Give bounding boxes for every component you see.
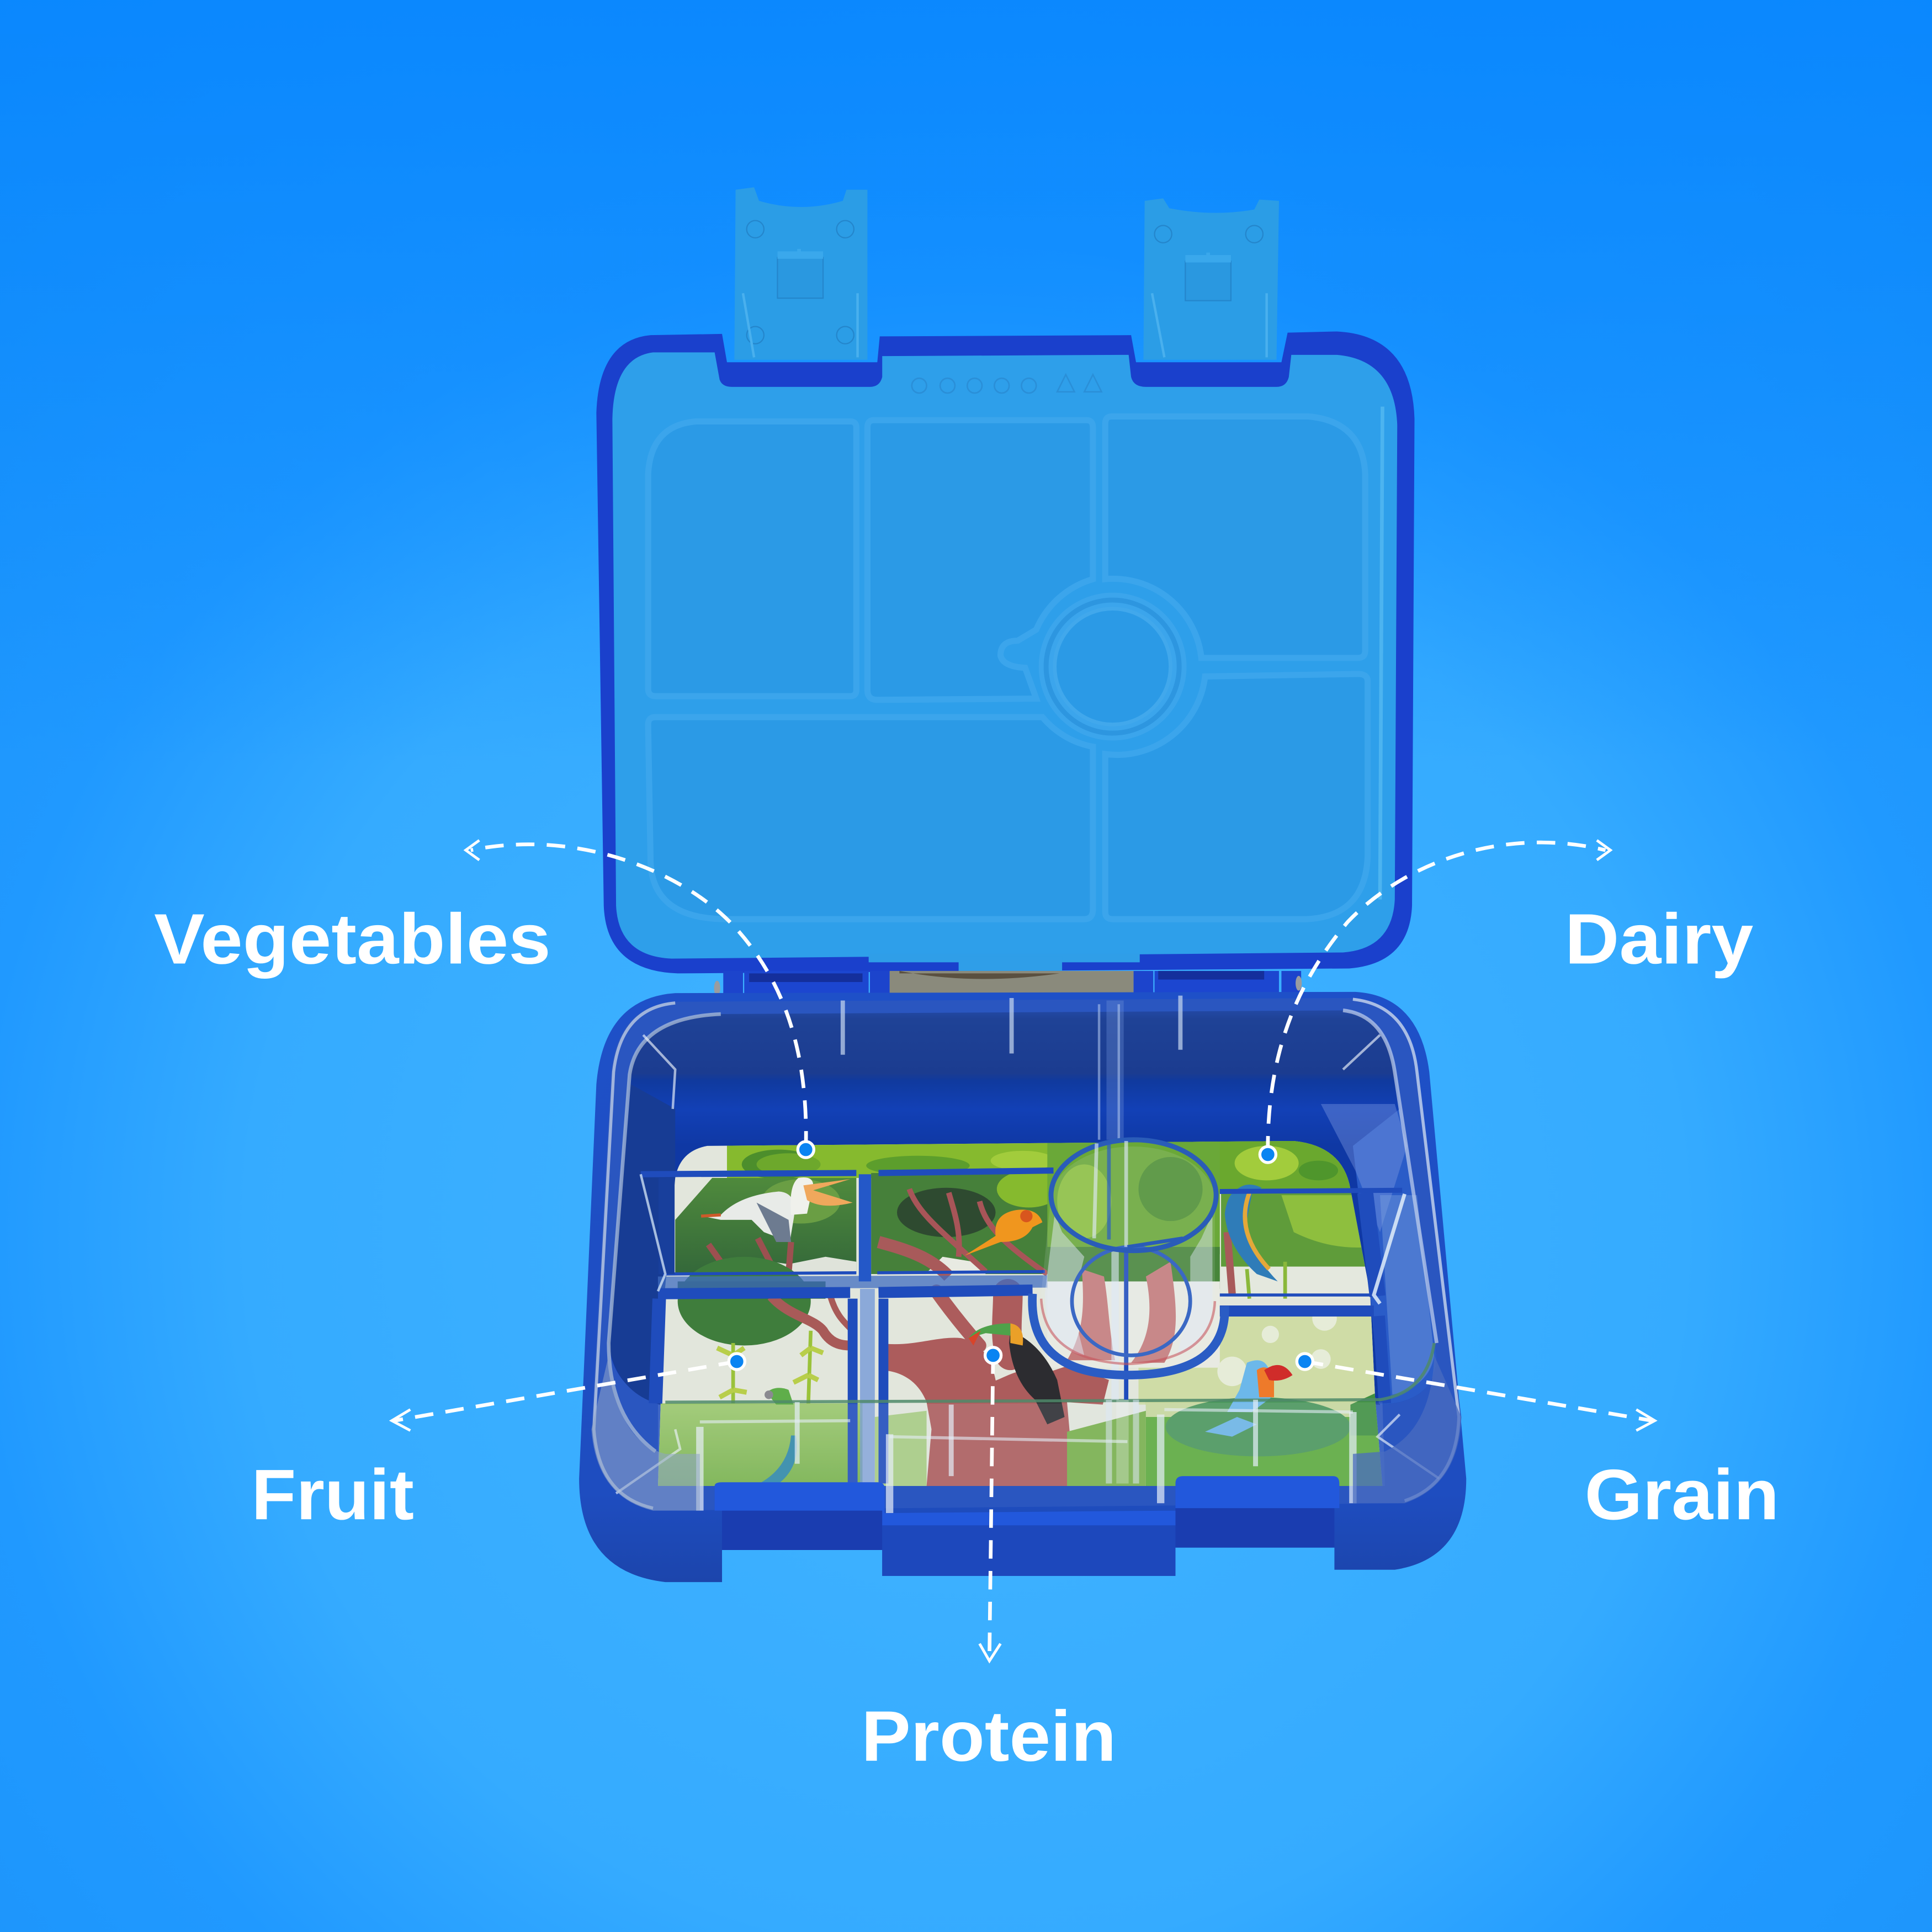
centre foliage [871, 1171, 1061, 1276]
back wall ribs [843, 996, 1180, 1055]
cup-area backdrop [1047, 1141, 1220, 1368]
callout line: fruit [392, 1362, 737, 1431]
cup walls [1045, 1214, 1084, 1355]
pelican foliage [675, 1178, 856, 1274]
front lip line [700, 1410, 1353, 1442]
front rim [665, 1343, 1434, 1402]
bird: toucan [968, 1323, 1065, 1424]
callout lines [392, 840, 1655, 1661]
back wall [609, 1010, 1437, 1405]
middle horizontal divider [663, 1272, 1045, 1274]
lower left foliage [678, 1257, 853, 1405]
label: Vegetables: Vegetables [154, 900, 551, 979]
ground [658, 1390, 1386, 1491]
hinge area [714, 971, 1302, 1000]
vertical divider back [1099, 1004, 1119, 1140]
open tab [869, 954, 1140, 976]
upper horizontal divider [641, 1171, 1053, 1174]
lunch box [579, 187, 1466, 1582]
callout dots [729, 1142, 1313, 1370]
right side wall [1353, 1109, 1437, 1405]
lid compartment: upper middle [867, 420, 1093, 700]
lid compartment: centre ring [1039, 593, 1187, 741]
label: Fruit: Fruit [251, 1455, 414, 1535]
tree trunk [879, 1338, 1109, 1486]
left compartment walls [663, 1178, 670, 1274]
tree branches [936, 1291, 1010, 1355]
diagonal glass panels [641, 1174, 665, 1291]
lower glass corners [591, 1355, 1461, 1511]
callout line: vegetables [466, 840, 806, 1150]
bird: pelican [701, 1177, 853, 1242]
bird: macaw [1225, 1185, 1278, 1281]
glass gap band [658, 1281, 1047, 1283]
lid inner tray [612, 352, 1397, 959]
open lid [596, 187, 1414, 976]
lid compartment: upper left [648, 421, 856, 696]
box base [579, 992, 1466, 1582]
clear tray dividers [594, 996, 1459, 1513]
moulded recycling marks [912, 375, 1102, 393]
clasp: right [1143, 198, 1279, 360]
outer rim [594, 1003, 675, 1508]
label: Dairy: Dairy [1565, 900, 1753, 979]
jungle picture [658, 1141, 1382, 1486]
central divider lower [1109, 1247, 1136, 1484]
label: Protein: Protein [861, 1697, 1116, 1776]
front wall ribs [797, 1400, 1256, 1476]
bird: red beak parrot [1205, 1360, 1293, 1437]
clasp: left [734, 187, 867, 360]
dip cup cylinder [1032, 1140, 1225, 1375]
corner reflections [616, 1035, 1439, 1493]
clear tray rim [591, 998, 1461, 1511]
lid compartment: lower left [648, 717, 1093, 919]
socket ring [1032, 1294, 1225, 1375]
lid compartment: upper right [1105, 416, 1365, 658]
base shell [579, 992, 1466, 1582]
callout line: protein [980, 1355, 1000, 1661]
left side wall [609, 1084, 675, 1405]
right foliage [1221, 1190, 1375, 1299]
canopy strip [727, 1141, 1368, 1193]
front clasp tabs [715, 1476, 1339, 1576]
bird: orange [965, 1209, 1042, 1256]
callout line: dairy [1268, 840, 1610, 1155]
right horizontal dividers [1220, 1190, 1402, 1191]
front corner posts [700, 1412, 1353, 1513]
lid compartment: lower right [1105, 674, 1368, 919]
glass veil over front wall [658, 1402, 1385, 1486]
vertical divider left [862, 1174, 868, 1281]
bird: green parrot [761, 1388, 797, 1484]
polka dots [1217, 1306, 1337, 1386]
label: Grain: Grain [1585, 1455, 1779, 1535]
callout line: grain [1305, 1362, 1655, 1431]
lid shell [596, 331, 1414, 973]
right corner glass [1321, 1104, 1407, 1232]
